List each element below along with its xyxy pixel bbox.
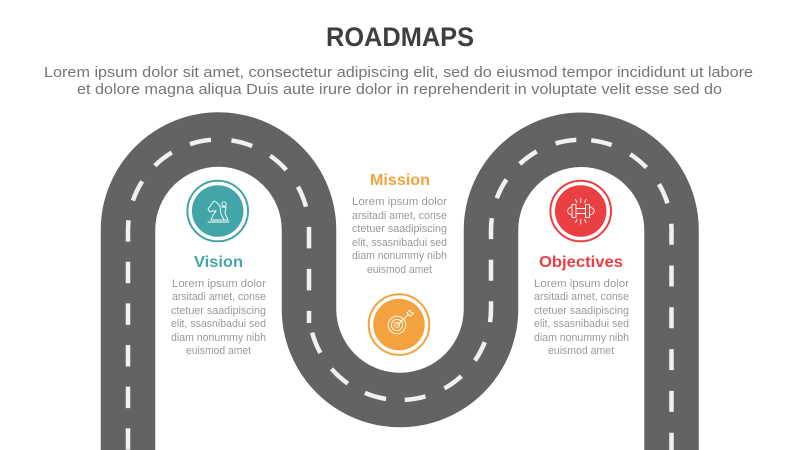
text block: mission: diam nonummy nibh bbox=[352, 250, 447, 262]
panel: vision bbox=[171, 181, 266, 357]
lane dashes: left arch, left side bbox=[128, 140, 218, 450]
lane dashes: right arch, right side bbox=[581, 140, 672, 450]
text block: objectives: euismod amet bbox=[548, 345, 614, 357]
panel: mission bbox=[352, 172, 447, 355]
icon: dumbbell on red circle bbox=[550, 181, 611, 241]
title: ROADMAPS bbox=[326, 22, 474, 52]
text block: objectives: elit, ssasnibadui sed bbox=[534, 318, 629, 330]
road surface bbox=[128, 140, 672, 450]
icon: knight and pawn on teal circle bbox=[187, 181, 248, 241]
text block: mission: Lorem ipsum dolor bbox=[352, 196, 447, 208]
icon: target on orange circle bbox=[369, 294, 429, 355]
subtitle text block bbox=[44, 64, 753, 98]
text block: objectives: ctetuer saadipiscing bbox=[534, 305, 629, 317]
text block: vision bbox=[171, 278, 266, 357]
text block: mission: euismod amet bbox=[367, 264, 432, 276]
heading: objectives: Objectives bbox=[539, 254, 623, 271]
subtitle text block: Lorem ipsum dolor sit amet, consectetur adipiscing elit, sed do eiusmod tempor incididunt ut labore bbox=[44, 64, 753, 81]
text block: mission: arsitadi amet, conse bbox=[352, 210, 447, 222]
text block: objectives: Lorem ipsum dolor bbox=[534, 278, 629, 290]
text block: vision: ctetuer saadipiscing bbox=[171, 305, 266, 317]
panel: objectives bbox=[534, 181, 629, 357]
text block: vision: Lorem ipsum dolor bbox=[172, 278, 266, 290]
text block: objectives: diam nonummy nibh bbox=[534, 332, 629, 344]
text block: vision: diam nonummy nibh bbox=[171, 332, 266, 344]
lane dashes: left arch, right side bbox=[218, 140, 309, 323]
heading: mission: Mission bbox=[370, 172, 430, 189]
text block: mission: ctetuer saadipiscing bbox=[352, 223, 447, 235]
heading: vision: Vision bbox=[194, 254, 243, 271]
lane dashes: right arch left side and U-bend right half bbox=[400, 140, 581, 400]
winding road bbox=[128, 140, 672, 450]
lane dashes: U-bend, left half bbox=[311, 327, 400, 400]
text block: mission bbox=[352, 196, 447, 276]
text block: objectives: arsitadi amet, conse bbox=[534, 291, 629, 303]
text block: mission: elit, ssasnibadui sed bbox=[352, 237, 447, 249]
text block: objectives bbox=[534, 278, 629, 357]
text block: vision: elit, ssasnibadui sed bbox=[171, 318, 266, 330]
text block: vision: arsitadi amet, conse bbox=[172, 291, 266, 303]
text block: vision: euismod amet bbox=[186, 345, 251, 357]
subtitle text block: et dolore magna aliqua Duis aute irure dolor in reprehenderit in voluptate velit esse sed do bbox=[77, 81, 722, 98]
